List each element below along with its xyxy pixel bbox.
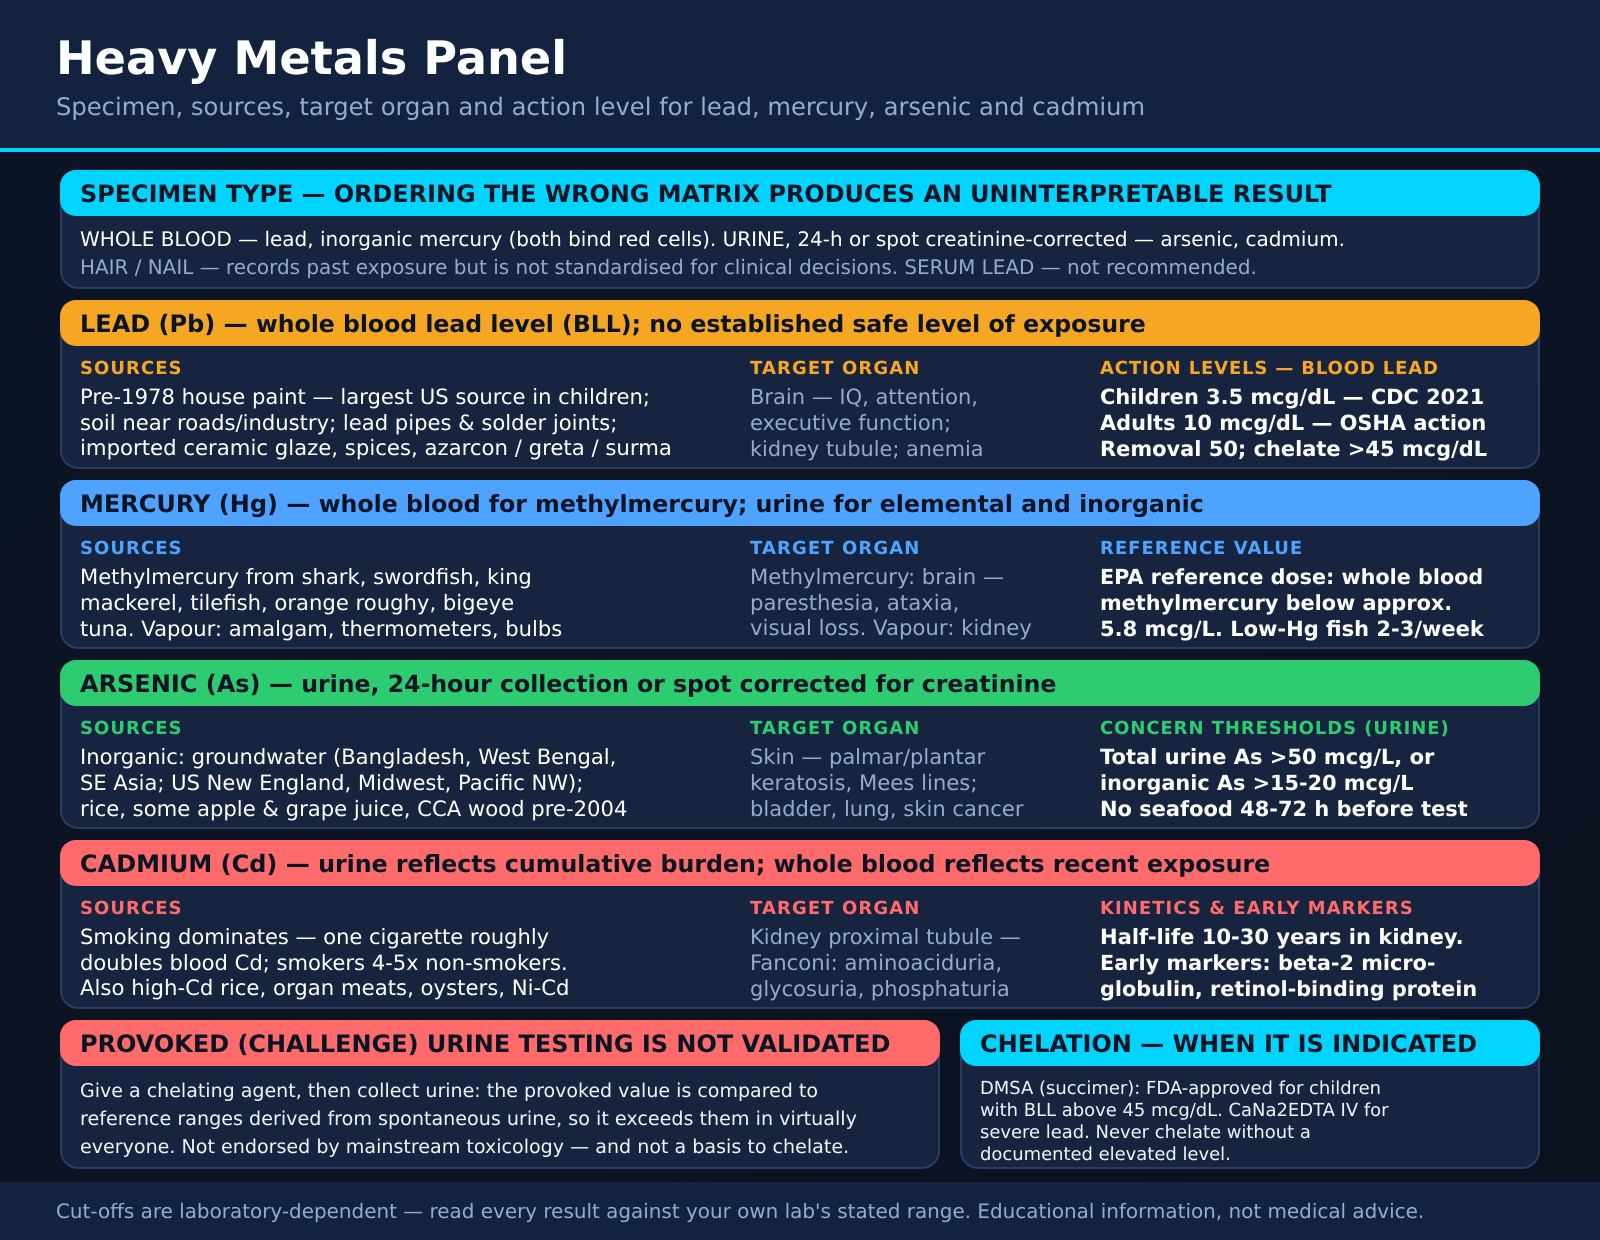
panel: chelation: [960, 1020, 1540, 1169]
text: provoked testing explanation: [80, 1080, 857, 1158]
column: mercury sources: Methylmercury from shark, swordfish, king: [80, 564, 532, 589]
column: lead target organ: Brain — IQ, attention,: [750, 385, 978, 409]
column: lead sources: Pre-1978 house paint — largest US source in children;: [80, 384, 650, 409]
column: mercury reference value: methylmercury below approx.: [1100, 591, 1452, 615]
text: specimen details: [80, 227, 1345, 279]
column: lead target organ: executive function;: [750, 411, 951, 435]
column: lead sources: SOURCES: [80, 358, 183, 379]
column: arsenic target organ: [750, 718, 1024, 821]
column: cadmium target organ: TARGET ORGAN: [750, 898, 920, 919]
column: lead sources: soil near roads/industry; lead pipes & solder joints;: [80, 410, 617, 435]
column: arsenic sources: SE Asia; US New England, Midwest, Pacific NW);: [80, 770, 583, 795]
column: arsenic concern thresholds: [1100, 718, 1468, 821]
column: cadmium kinetics and early markers: globulin, retinol-binding protein: [1100, 977, 1477, 1001]
text: provoked testing explanation: everyone. Not endorsed by mainstream toxicology — and not a basis to chelate.: [80, 1136, 849, 1158]
column: arsenic concern thresholds: Total urine As >50 mcg/L, or: [1100, 745, 1434, 769]
column: mercury target organ: visual loss. Vapour: kidney: [750, 616, 1032, 641]
text: chelation indications: DMSA (succimer): FDA-approved for children: [980, 1078, 1381, 1099]
column: arsenic concern thresholds: No seafood 48-72 h before test: [1100, 797, 1468, 821]
column: cadmium target organ: [750, 898, 1021, 1001]
column: arsenic sources: Inorganic: groundwater (Bangladesh, West Bengal,: [80, 744, 616, 769]
heading: lead: LEAD (Pb) — whole blood lead level (BLL); no established safe level of exposure: [80, 310, 1146, 338]
text: chelation indications: with BLL above 45 mcg/dL. CaNa2EDTA IV for: [980, 1100, 1388, 1121]
column: arsenic sources: SOURCES: [80, 718, 183, 739]
text: chelation indications: documented elevated level.: [980, 1144, 1231, 1165]
column: arsenic concern thresholds: CONCERN THRESHOLDS (URINE): [1100, 718, 1450, 739]
title: Heavy Metals Panel: [56, 31, 567, 85]
column: lead action levels: Children 3.5 mcg/dL — CDC 2021: [1100, 385, 1484, 409]
column: lead target organ: kidney tubule; anemia: [750, 437, 984, 461]
footer band: [0, 1182, 1600, 1240]
column: lead action levels: Removal 50; chelate >45 mcg/dL: [1100, 437, 1487, 461]
column: cadmium target organ: Kidney proximal tubule —: [750, 925, 1021, 949]
heading: mercury: [60, 480, 1540, 526]
column: mercury sources: tuna. Vapour: amalgam, thermometers, bulbs: [80, 616, 562, 641]
heading: chelation: [960, 1020, 1540, 1066]
column: mercury target organ: [750, 538, 1032, 641]
column: lead target organ: TARGET ORGAN: [750, 358, 920, 379]
heading: specimen type: SPECIMEN TYPE — ORDERING THE WRONG MATRIX PRODUCES AN UNINTERPRETABLE RESULT: [80, 180, 1332, 208]
panel: arsenic: [60, 660, 1540, 829]
column: mercury target organ: TARGET ORGAN: [750, 538, 920, 559]
heading: cadmium: [60, 840, 1540, 886]
column: arsenic sources: rice, some apple & grape juice, CCA wood pre-2004: [80, 796, 627, 821]
text: chelation indications: severe lead. Never chelate without a: [980, 1122, 1311, 1143]
column: mercury sources: [80, 538, 562, 641]
column: cadmium kinetics and early markers: Early markers: beta-2 micro-: [1100, 951, 1436, 975]
heading: lead: [60, 300, 1540, 346]
heading: provoked urine testing: [60, 1020, 940, 1066]
column: arsenic target organ: bladder, lung, skin cancer: [750, 796, 1024, 821]
text: specimen details: WHOLE BLOOD — lead, inorganic mercury (both bind red cells). URINE, 24-h or spot creatinine-corrected — arsenic, cadmium.: [80, 227, 1345, 251]
header band: [0, 0, 1600, 152]
column: lead action levels: [1100, 358, 1487, 461]
column: cadmium sources: Smoking dominates — one cigarette roughly: [80, 924, 549, 949]
column: arsenic target organ: TARGET ORGAN: [750, 718, 920, 739]
column: cadmium sources: [80, 898, 570, 1001]
heading: cadmium: CADMIUM (Cd) — urine reflects cumulative burden; whole blood reflects recent exposure: [80, 850, 1270, 878]
text: provoked testing explanation: reference ranges derived from spontaneous urine, so it exceeds them in virtually: [80, 1107, 857, 1130]
column: lead sources: [80, 358, 672, 461]
heading: arsenic: ARSENIC (As) — urine, 24-hour collection or spot corrected for creatinine: [80, 670, 1056, 698]
column: mercury sources: SOURCES: [80, 538, 183, 559]
column: cadmium sources: Also high-Cd rice, organ meats, oysters, Ni-Cd: [80, 976, 570, 1001]
column: cadmium kinetics and early markers: KINETICS & EARLY MARKERS: [1100, 898, 1414, 919]
column: mercury reference value: [1100, 538, 1484, 641]
column: arsenic target organ: Skin — palmar/plantar: [750, 745, 985, 769]
column: cadmium kinetics and early markers: [1100, 898, 1477, 1001]
column: lead action levels: Adults 10 mcg/dL — OSHA action: [1100, 411, 1486, 435]
panel: cadmium: [60, 840, 1540, 1009]
column: lead action levels: ACTION LEVELS — BLOOD LEAD: [1100, 358, 1439, 379]
panel: provoked urine testing: [60, 1020, 940, 1169]
column: cadmium target organ: glycosuria, phosphaturia: [750, 977, 1010, 1001]
column: arsenic concern thresholds: inorganic As >15-20 mcg/L: [1100, 771, 1414, 795]
column: cadmium kinetics and early markers: Half-life 10-30 years in kidney.: [1100, 924, 1464, 949]
heading: chelation: CHELATION — WHEN IT IS INDICATED: [980, 1030, 1477, 1058]
panel: lead: [60, 300, 1540, 469]
heading: arsenic: [60, 660, 1540, 706]
column: cadmium sources: doubles blood Cd; smokers 4-5x non-smokers.: [80, 950, 568, 975]
column: lead sources: imported ceramic glaze, spices, azarcon / greta / surma: [80, 436, 672, 461]
text: specimen details: HAIR / NAIL — records past exposure but is not standardised for clinical decisions. SERUM LEAD — not recommended.: [80, 255, 1257, 279]
heading: provoked urine testing: PROVOKED (CHALLENGE) URINE TESTING IS NOT VALIDATED: [80, 1030, 890, 1058]
heading: mercury: MERCURY (Hg) — whole blood for methylmercury; urine for elemental and inorganic: [80, 490, 1204, 518]
subtitle: Specimen, sources, target organ and action level for lead, mercury, arsenic and cadmium: [56, 93, 1145, 121]
column: mercury target organ: Methylmercury: brain —: [750, 564, 1004, 589]
column: lead target organ: [750, 358, 984, 461]
column: arsenic target organ: keratosis, Mees lines;: [750, 770, 978, 795]
column: mercury reference value: EPA reference dose: whole blood: [1100, 565, 1483, 589]
column: mercury target organ: paresthesia, ataxia,: [750, 590, 959, 615]
heading: specimen type: [60, 170, 1540, 216]
text: chelation indications: [980, 1078, 1388, 1165]
text: provoked testing explanation: Give a chelating agent, then collect urine: the provoked value is compared to: [80, 1080, 818, 1102]
footer note: Cut-offs are laboratory-dependent — read every result against your own lab's stated range. Educational information, not medical advice.: [56, 1199, 1424, 1223]
column: mercury sources: mackerel, tilefish, orange roughy, bigeye: [80, 590, 514, 615]
column: arsenic sources: [80, 718, 627, 821]
column: mercury reference value: 5.8 mcg/L. Low-Hg fish 2-3/week: [1100, 617, 1484, 641]
column: cadmium target organ: Fanconi: aminoaciduria,: [750, 950, 1002, 975]
panel: mercury: [60, 480, 1540, 649]
panel: specimen type: [60, 170, 1540, 289]
column: cadmium sources: SOURCES: [80, 898, 183, 919]
column: mercury reference value: REFERENCE VALUE: [1100, 538, 1303, 559]
